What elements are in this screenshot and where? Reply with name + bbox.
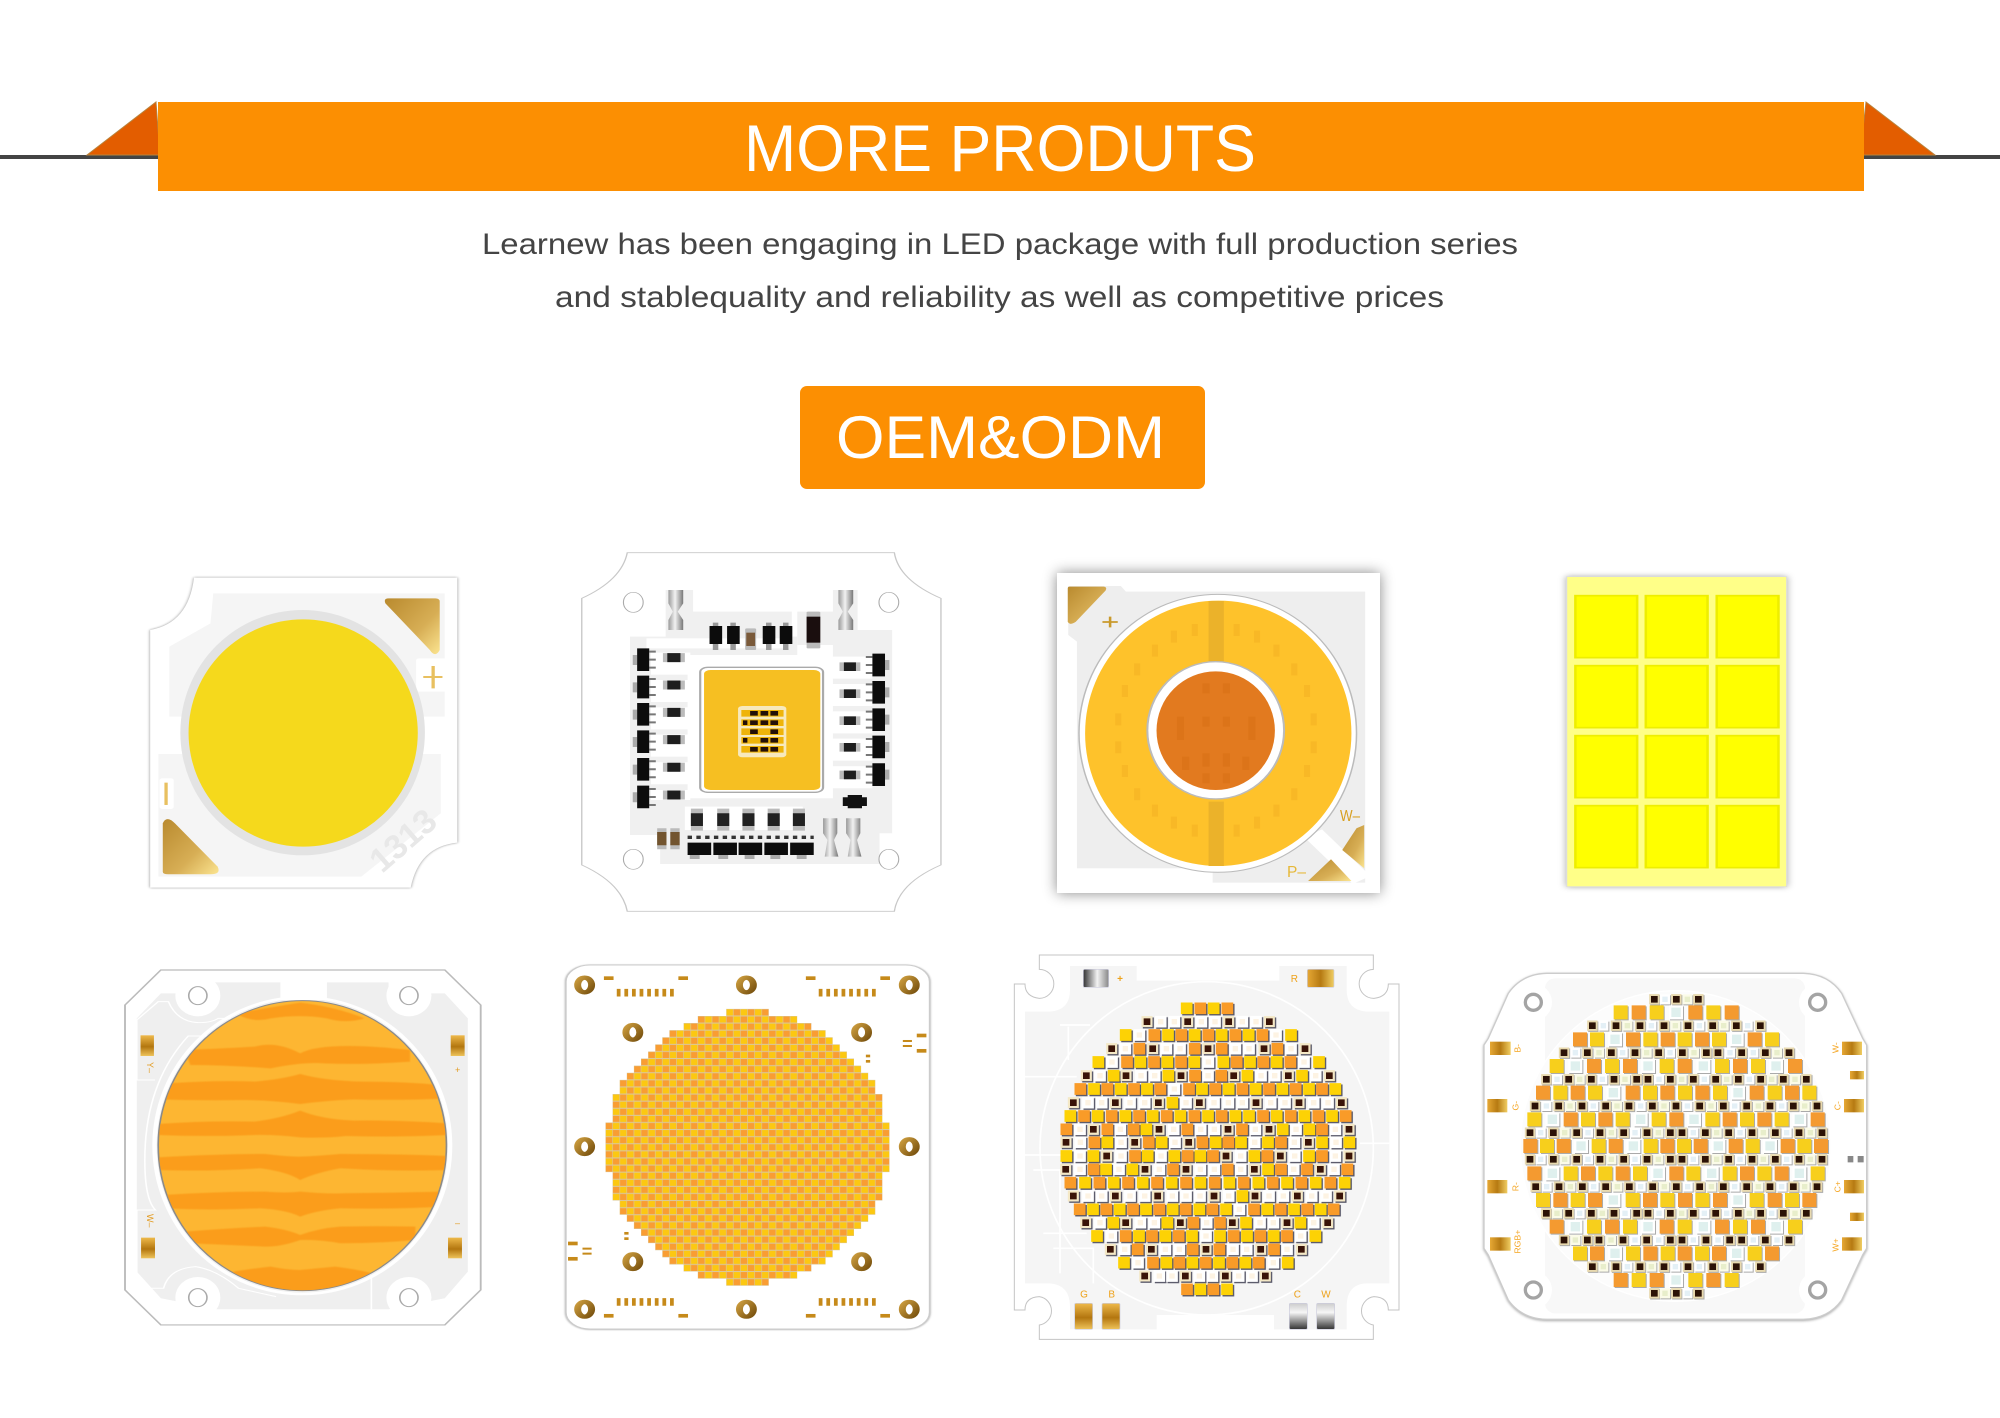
product 4: yellow 12-cell chip xyxy=(1567,577,1787,887)
pad labels: RGB+ xyxy=(1513,1230,1523,1254)
yellow chips xyxy=(1534,1012,1818,1280)
left baseline rule xyxy=(0,155,160,159)
connector fingers xyxy=(617,993,878,1302)
copper panel xyxy=(1025,966,1389,1329)
pad labels: B xyxy=(1108,1290,1115,1301)
pale small chips xyxy=(1557,999,1810,1293)
divider strips xyxy=(1209,601,1224,866)
product 7: RGBCW square array xyxy=(1014,955,1399,1339)
W- label: W– xyxy=(1340,808,1360,825)
white chip lens xyxy=(1080,1022,1336,1276)
dark chips base xyxy=(1530,999,1822,1293)
resistor bays xyxy=(646,638,872,830)
board outline xyxy=(1484,973,1867,1319)
orange chips xyxy=(1066,1008,1347,1289)
phosphor disc xyxy=(189,619,418,847)
intro text: Learnew has been engaging in LED package with full production series xyxy=(482,228,1518,261)
centre phosphor xyxy=(1157,671,1275,790)
board outline xyxy=(1014,955,1399,1339)
white clearance xyxy=(688,655,833,798)
pad labels: R xyxy=(1291,974,1298,985)
mounting holes xyxy=(1525,994,1826,1298)
model number: 1313 xyxy=(362,802,444,880)
plated holes xyxy=(578,978,916,1317)
bottom bridge blocks xyxy=(688,837,814,859)
white large chip lens xyxy=(1552,1012,1799,1280)
pad labels: R- xyxy=(1511,1182,1521,1191)
pad labels: B- xyxy=(1513,1044,1523,1053)
left rectifier column xyxy=(633,648,656,808)
intro text: and stablequality and reliability as well as competitive prices xyxy=(555,281,1444,314)
right ribbon fold xyxy=(1860,102,1935,155)
product 5: octagonal striped COB xyxy=(125,970,481,1325)
emitter cells xyxy=(1575,596,1778,868)
LED chips xyxy=(1530,999,1822,1293)
emitter disc xyxy=(158,1001,446,1291)
phosphor annulus xyxy=(1085,601,1351,866)
pad isolation stripe xyxy=(1313,833,1362,880)
grey panel xyxy=(137,982,468,1309)
contact pads xyxy=(141,1035,465,1258)
emitter ring xyxy=(180,610,425,855)
panel traces xyxy=(137,1002,371,1309)
gold pads bottom right xyxy=(1308,825,1364,881)
hole clearances xyxy=(175,975,431,1318)
gold pad bottom left xyxy=(163,819,219,874)
left resistor column xyxy=(663,658,685,795)
phosphor square xyxy=(704,670,820,790)
grey panel xyxy=(1068,586,1365,883)
dark chips base xyxy=(1066,1022,1349,1276)
minus mark xyxy=(159,778,174,809)
banner bar xyxy=(158,102,1864,191)
product 1: 1313 COB xyxy=(150,578,457,888)
small transistor xyxy=(843,795,867,808)
white large chips xyxy=(1552,1012,1799,1280)
bottom resistors xyxy=(697,809,799,831)
die marks on annulus xyxy=(1118,624,1314,837)
board outline xyxy=(125,970,481,1325)
gold pad top right xyxy=(385,598,440,654)
OEM and ODM badge: OEM&ODM xyxy=(836,404,1165,471)
pad labels: – xyxy=(455,1218,460,1228)
white small chips xyxy=(1541,999,1787,1293)
top diodes xyxy=(710,623,792,650)
header banner xyxy=(0,102,2000,191)
OEM and ODM badge xyxy=(800,386,1205,489)
orange chips xyxy=(1530,1012,1821,1280)
LED chips xyxy=(1066,1008,1349,1289)
copper traces area xyxy=(630,590,892,864)
white small chip lens xyxy=(1541,999,1787,1293)
plus mark xyxy=(416,658,446,692)
substrate with shadow xyxy=(1057,573,1380,893)
intro text xyxy=(482,228,1518,314)
pad labels: Y– xyxy=(145,1062,155,1073)
pad labels: W– xyxy=(145,1214,155,1228)
trace lines xyxy=(1025,982,1389,1315)
hole clearances xyxy=(1515,984,1836,1309)
substrate xyxy=(1567,577,1787,887)
right baseline rule xyxy=(1860,155,2000,159)
pad labels: C- xyxy=(1833,1101,1843,1110)
title: MORE PRODUTS xyxy=(744,111,1256,185)
pad labels: + xyxy=(1117,974,1123,985)
pad labels: + xyxy=(455,1065,460,1075)
LED grid xyxy=(606,1012,890,1282)
pad labels xyxy=(1080,974,1331,1301)
emitter halo xyxy=(154,997,450,1294)
dark chips core xyxy=(1066,1022,1349,1276)
centre die marks xyxy=(1181,683,1252,783)
terminal pins xyxy=(668,590,861,857)
pale small chip lens xyxy=(1557,999,1810,1293)
grey test points xyxy=(1848,1156,1864,1162)
right rectifier column xyxy=(866,654,889,786)
board outline xyxy=(582,553,941,911)
gold pad top left xyxy=(1068,587,1106,624)
pad labels: W+ xyxy=(1831,1238,1841,1252)
edge pads xyxy=(568,976,926,1318)
fuse xyxy=(807,612,820,648)
product 6: dense LED array board xyxy=(566,965,930,1329)
pad labels xyxy=(145,1062,460,1228)
white chips xyxy=(1080,1022,1336,1276)
yellow chips xyxy=(1066,1008,1349,1289)
pad labels: G xyxy=(1080,1290,1088,1301)
board outline xyxy=(566,965,930,1329)
array clearance xyxy=(1520,991,1831,1301)
board and emitter xyxy=(150,578,457,888)
LED array xyxy=(738,706,786,757)
pad labels: C+ xyxy=(1833,1181,1843,1192)
pad labels xyxy=(1511,1042,1843,1254)
pad labels: W xyxy=(1321,1290,1331,1301)
mounting holes xyxy=(623,592,899,869)
pad labels: G- xyxy=(1511,1101,1521,1110)
pad labels: C xyxy=(1294,1290,1301,1301)
dark chips core xyxy=(1530,999,1822,1293)
copper panel xyxy=(1545,978,1805,1313)
product 2: driverless AC module xyxy=(582,553,941,911)
pad labels: W- xyxy=(1831,1042,1841,1053)
LED die frame xyxy=(700,667,823,792)
orange bands xyxy=(158,1003,447,1293)
P- label: P– xyxy=(1287,864,1306,881)
product 8: RGBWC round-corner array xyxy=(1484,973,1867,1319)
contact pads xyxy=(1487,1042,1864,1251)
left ribbon fold xyxy=(87,102,160,155)
brown capacitors xyxy=(662,828,675,849)
outer ring xyxy=(1079,594,1357,872)
right resistor column xyxy=(840,667,860,775)
mounting holes xyxy=(189,987,418,1307)
product 3: two-circuit COB xyxy=(1057,573,1380,893)
contact pads xyxy=(1075,969,1335,1329)
centre ring xyxy=(1147,662,1284,799)
plus mark xyxy=(1102,617,1118,627)
